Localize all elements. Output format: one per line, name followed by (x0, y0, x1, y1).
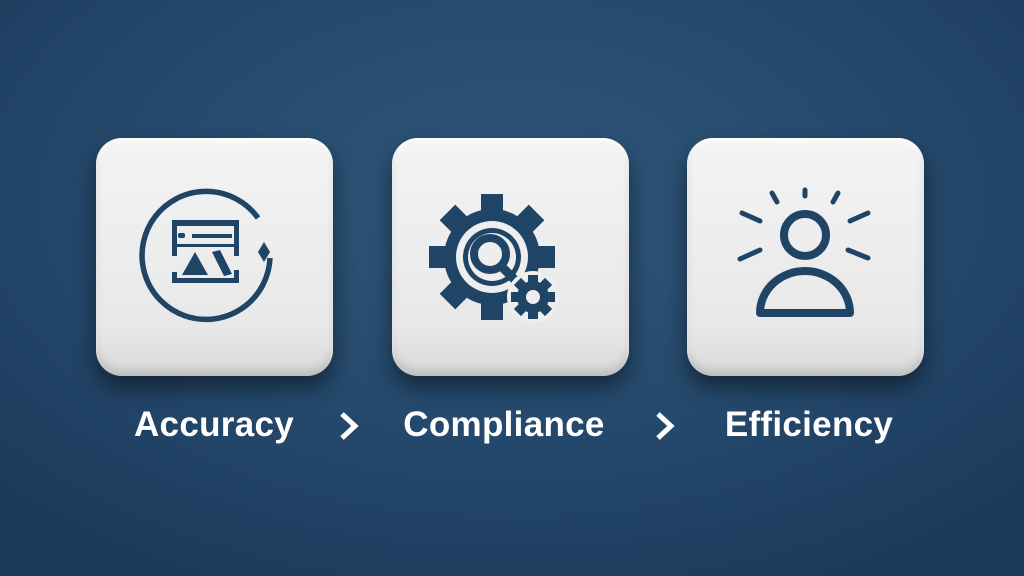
label: Compliance: Compliance (403, 405, 605, 444)
card: accuracy (96, 138, 333, 376)
icon: gear with magnifier (429, 194, 555, 320)
label: Efficiency: Efficiency (725, 405, 893, 444)
card: efficiency (687, 138, 924, 376)
card: compliance (392, 138, 629, 376)
label: Accuracy: Accuracy (134, 405, 294, 444)
icon: person with rays (738, 188, 870, 317)
arrow 2 (656, 412, 675, 440)
icon: document refresh (139, 188, 273, 322)
arrow 1 (340, 412, 359, 440)
